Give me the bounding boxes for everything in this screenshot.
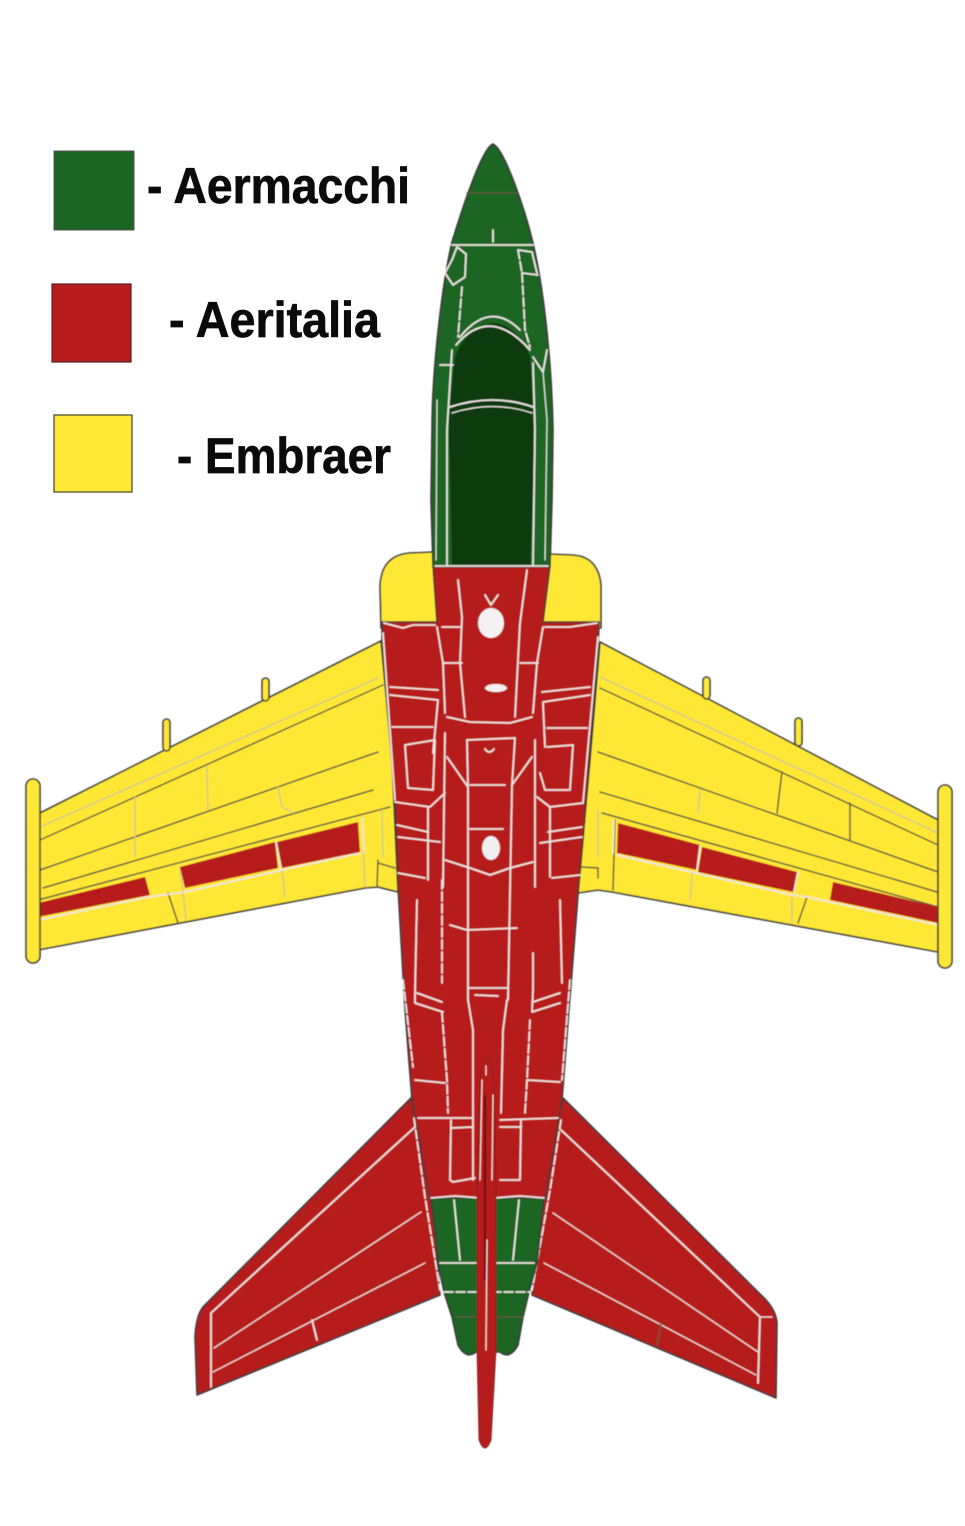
- right outer pylon: [795, 718, 802, 746]
- left wingtip tank: [26, 779, 40, 963]
- right tailplane (Aeritalia): [532, 1098, 777, 1398]
- left inner pylon: [262, 678, 269, 701]
- right wingtip tank: [938, 785, 952, 968]
- legend entry: Embraer: [54, 415, 391, 492]
- legend entry: Aeritalia: [52, 284, 381, 362]
- right wing (Embraer): [578, 642, 938, 952]
- left ailerons (Aeritalia): [38, 818, 364, 920]
- left tailplane (Aeritalia): [195, 1098, 440, 1395]
- nose and cockpit section (Aermacchi): [431, 144, 553, 567]
- legend entry: Aermacchi: - Aermacchi: [147, 158, 410, 214]
- left air intake (Embraer): [380, 552, 440, 628]
- white markings on spine: [478, 595, 507, 860]
- tail fin (Aeritalia): [477, 1058, 496, 1448]
- legend: [52, 151, 410, 492]
- central fuselage (Aeritalia): [382, 566, 599, 1290]
- right air intake (Embraer): [540, 554, 601, 628]
- legend entry: Aeritalia: - Aeritalia: [169, 292, 381, 348]
- rear fuselage section (Aermacchi): [431, 1196, 544, 1355]
- legend entry: Aermacchi: [54, 151, 410, 230]
- fuselage panel lines: [383, 570, 598, 1290]
- right inner pylon: [703, 677, 710, 699]
- left wing (Embraer): [38, 641, 398, 950]
- left outer pylon: [163, 719, 170, 751]
- right ailerons (Aeritalia): [613, 820, 938, 925]
- legend entry: Embraer: - Embraer: [177, 428, 391, 484]
- canopy: [449, 323, 534, 565]
